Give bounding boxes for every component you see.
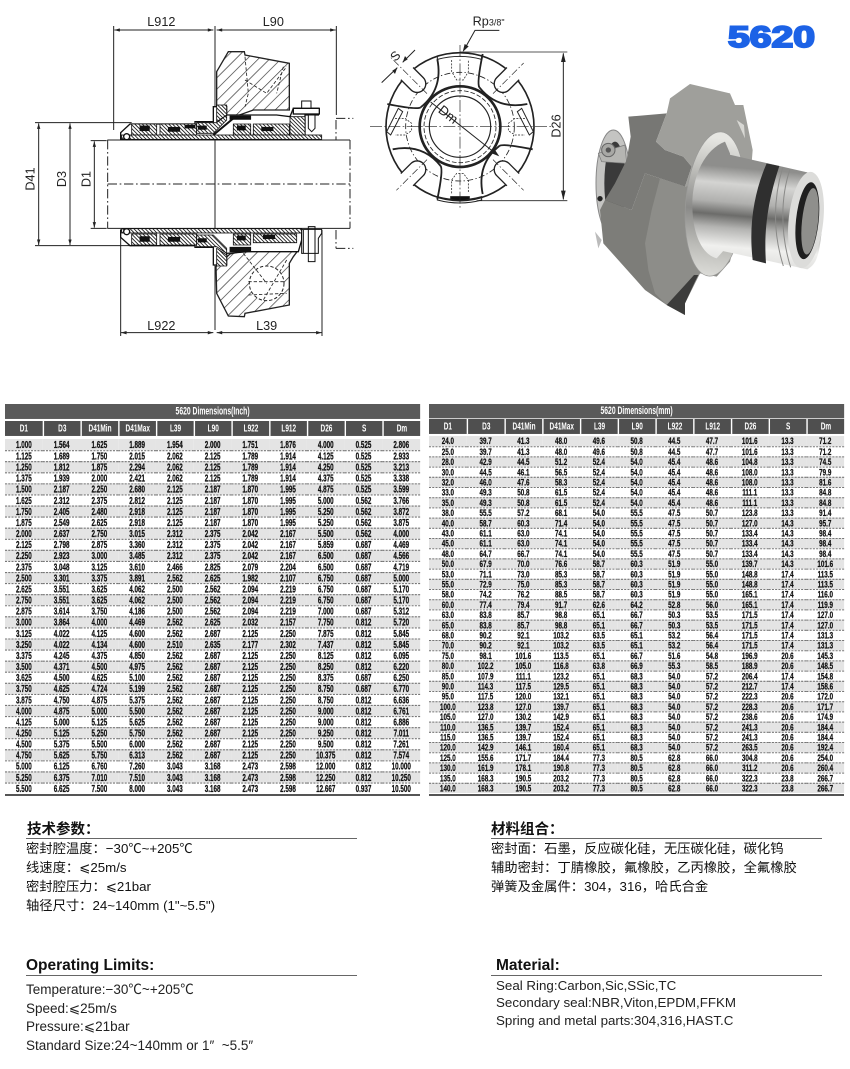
black o-ring band bbox=[751, 163, 779, 263]
centre lines bbox=[370, 45, 553, 210]
mm table header: D3 bbox=[482, 421, 490, 433]
mm table header: L922 bbox=[668, 421, 682, 433]
mm table header: L90 bbox=[632, 421, 643, 433]
dimension labels: L922 bbox=[147, 319, 175, 333]
inch table header: Dm bbox=[397, 422, 407, 434]
dimension arrows bbox=[39, 30, 336, 333]
mm table title: 5620 Dimensions(mm) bbox=[600, 405, 673, 417]
flange notch wall bbox=[605, 113, 692, 210]
millimetre dimensions table bbox=[429, 404, 844, 796]
mm table header: D41Min bbox=[513, 421, 536, 433]
limits list bbox=[26, 982, 253, 1053]
dimension D26 bbox=[460, 52, 567, 201]
mm table header: Dm bbox=[821, 421, 831, 433]
mm table header: D41Max bbox=[550, 421, 574, 433]
limits list: Standard Size:24~140mm or 1″ ~5.5″ bbox=[26, 1038, 253, 1053]
inch table header: D26 bbox=[321, 422, 332, 434]
front ring bbox=[679, 129, 751, 279]
dimension labels: L912 bbox=[147, 15, 175, 29]
dimension labels: D41 bbox=[24, 167, 38, 191]
material list: 弹簧及金属件：304，316，哈氏合金 bbox=[491, 879, 708, 894]
limits list: Speed:⩽25m/s bbox=[26, 1001, 117, 1016]
limits list: Pressure:⩽21bar bbox=[26, 1019, 130, 1034]
material list: Seal Ring:Carbon,Sic,SSic,TC bbox=[496, 978, 676, 993]
flange upper face bbox=[656, 84, 753, 187]
upper seal cartridge bbox=[121, 101, 322, 140]
flange lower side bbox=[600, 173, 685, 315]
dimension S bbox=[382, 48, 415, 83]
model number title: 5620 bbox=[728, 21, 815, 54]
panel: materials (Chinese) bbox=[491, 821, 822, 894]
hub circles bbox=[420, 86, 500, 167]
material list bbox=[496, 978, 736, 1028]
threaded ports bbox=[395, 60, 525, 193]
mm table title bbox=[429, 404, 844, 418]
parameter list: 密封腔压力：⩽21bar bbox=[26, 879, 151, 894]
material list: Spring and metal parts:304,316,HAST.C bbox=[496, 1013, 733, 1028]
callout Rp3/8: Rp3/8" bbox=[473, 15, 505, 29]
upper housing bbox=[217, 52, 289, 118]
mm table header: D1 bbox=[444, 421, 452, 433]
heading: Operating Limits: bbox=[26, 957, 154, 974]
material list: Secondary seal:NBR,Viton,EPDM,FFKM bbox=[496, 995, 736, 1010]
section drawing with dimensions bbox=[24, 15, 354, 336]
heading: Material: bbox=[496, 957, 560, 974]
material list: 密封面：石墨，反应碳化硅，无压碳化硅，碳化钨 bbox=[491, 841, 784, 856]
dark lower lobe bbox=[667, 275, 698, 315]
dimension Dm bbox=[431, 102, 498, 155]
panel: operating limits (English) bbox=[26, 957, 357, 1053]
product photo: seal cartridge bbox=[595, 84, 824, 315]
parameter list: 密封腔温度：−30℃~+205℃ bbox=[26, 841, 193, 856]
mm table header: S bbox=[786, 421, 790, 433]
heading: 材料组合： bbox=[491, 822, 564, 838]
inch table header bbox=[5, 421, 420, 436]
inch dimensions table bbox=[5, 404, 420, 796]
material list bbox=[491, 841, 797, 894]
mm table header: L39 bbox=[594, 421, 605, 433]
inch table header: S bbox=[362, 422, 366, 434]
dimension labels bbox=[24, 15, 284, 333]
dimension labels: L90 bbox=[263, 15, 284, 29]
inch table header: L922 bbox=[244, 422, 258, 434]
callout Rp3/8 bbox=[463, 15, 505, 52]
mm table header bbox=[429, 419, 844, 434]
flange body bbox=[386, 53, 534, 203]
inch table title bbox=[5, 404, 420, 419]
limits list: Temperature:−30℃~+205℃ bbox=[26, 982, 194, 997]
sleeve end bore bbox=[784, 170, 828, 270]
mm table rows bbox=[429, 436, 844, 793]
lower housing bbox=[216, 250, 298, 317]
heading: 技术参数： bbox=[27, 822, 100, 838]
inch table header: D41Max bbox=[126, 422, 150, 434]
dimension labels: D1 bbox=[80, 171, 94, 187]
inch table header: D3 bbox=[58, 422, 66, 434]
dimension Dm: Dm bbox=[435, 102, 461, 127]
sleeve step lines bbox=[775, 167, 791, 267]
material list: 辅助密封：丁腈橡胶，氟橡胶，乙丙橡胶，全氟橡胶 bbox=[491, 860, 797, 875]
dimension labels: L39 bbox=[256, 319, 277, 333]
mm table header: L912 bbox=[705, 421, 720, 433]
panel: material (English) bbox=[491, 957, 822, 1028]
inch table header: L912 bbox=[281, 422, 296, 434]
dimension D26: D26 bbox=[550, 114, 564, 138]
inch table header: L90 bbox=[208, 422, 219, 434]
dimension S: S bbox=[388, 48, 403, 64]
flange lower face bbox=[645, 177, 750, 315]
inch table title: 5620 Dimensions(Inch) bbox=[176, 405, 250, 417]
end view drawing with dimensions bbox=[370, 15, 568, 208]
hub bbox=[692, 142, 730, 258]
dimension labels: D3 bbox=[55, 171, 69, 187]
extension lines bbox=[35, 26, 353, 336]
inch table header: D1 bbox=[20, 422, 28, 434]
panel: technical parameters (Chinese) bbox=[26, 821, 357, 913]
shaft bbox=[107, 140, 350, 228]
lower seal cartridge bbox=[121, 227, 322, 266]
parameter list: 线速度：⩽25m/s bbox=[26, 860, 127, 875]
inch table rows bbox=[5, 439, 420, 793]
inch table header: L39 bbox=[170, 422, 181, 434]
left collar bbox=[595, 130, 631, 248]
sleeve bbox=[713, 154, 822, 269]
mm table header: D26 bbox=[745, 421, 756, 433]
parameter list bbox=[26, 841, 215, 913]
parameter list: 轴径尺寸：24~140mm (1"~5.5") bbox=[26, 898, 215, 913]
inch table header: D41Min bbox=[89, 422, 112, 434]
